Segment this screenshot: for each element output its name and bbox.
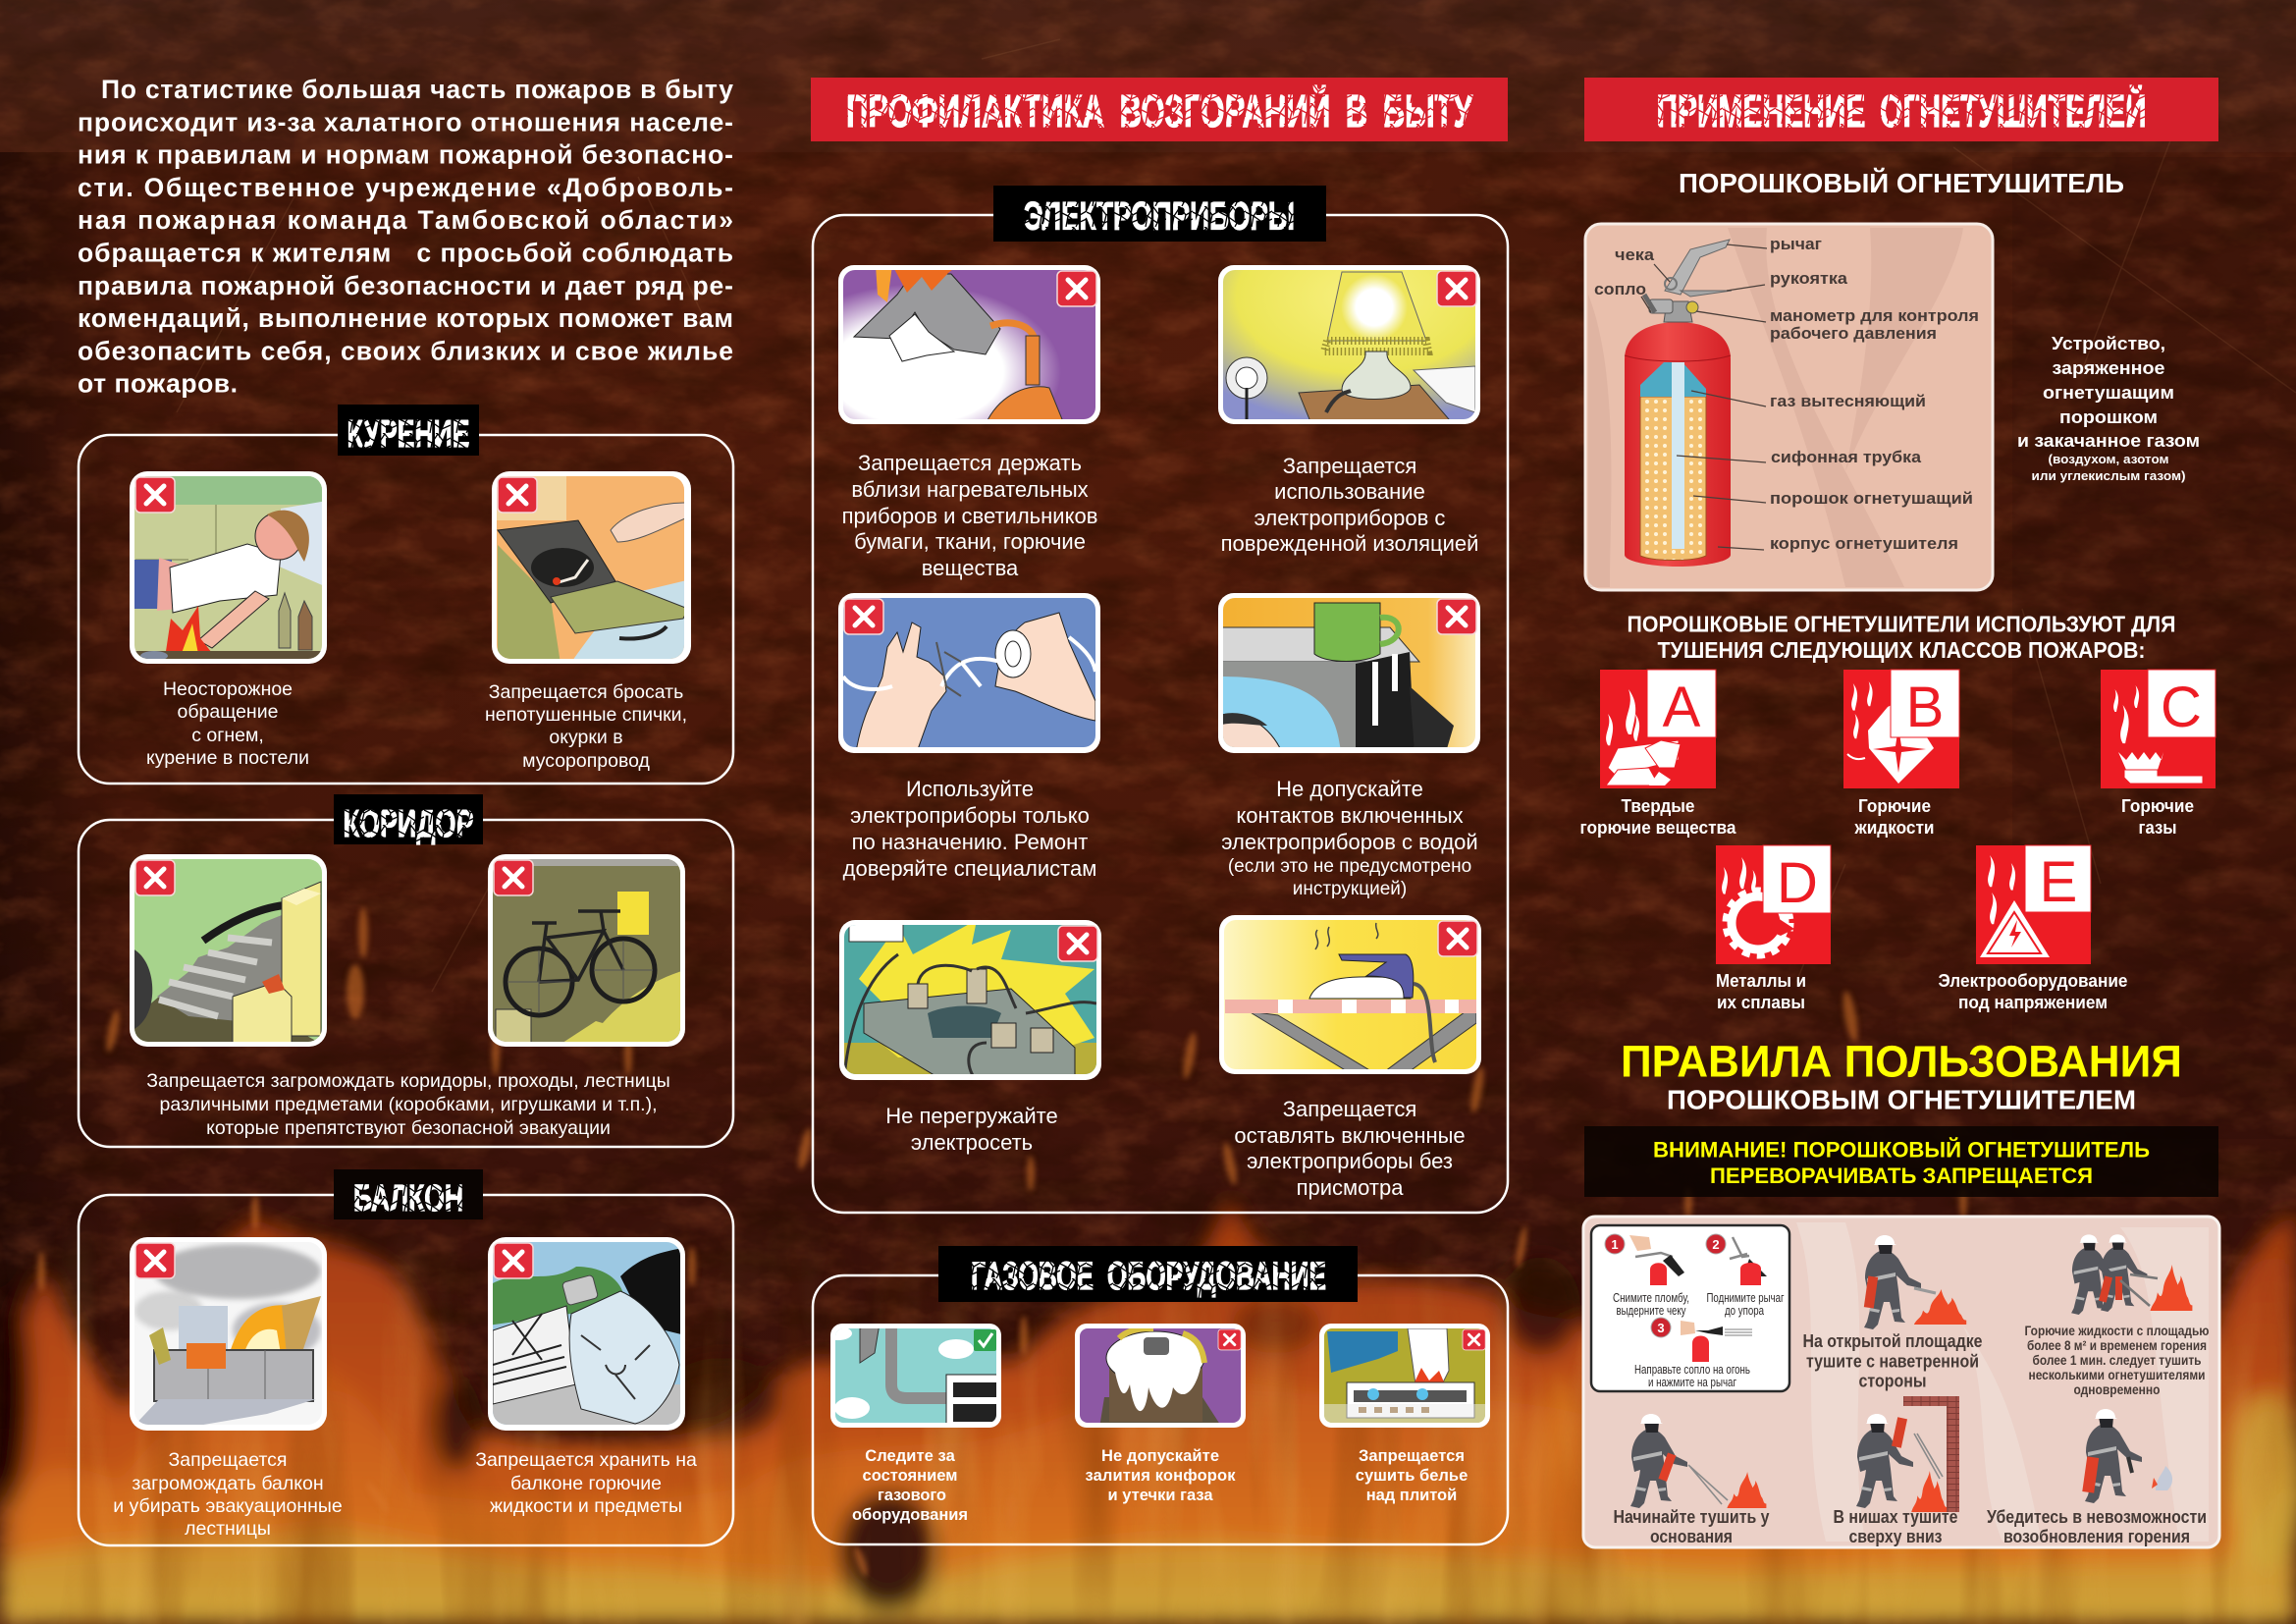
caption: do not overload: Не перегружайте [885, 1104, 1058, 1128]
intro paragraph: от пожаров. [78, 369, 238, 399]
caption: careless fire handling: Неосторожное [163, 678, 293, 700]
text: large spill rule: несколькими огнетушителями [2028, 1368, 2205, 1382]
illustration: cluttered stairs [130, 854, 327, 1047]
icon: fire class A: A [1663, 676, 1701, 739]
step 1 [1605, 1234, 1689, 1318]
illustration: flammables on balcony [488, 1237, 685, 1431]
labels: fire classes: Электрооборудование [1938, 971, 2128, 991]
step 2 [1706, 1234, 1785, 1318]
illustration: pot boiling over [1075, 1324, 1246, 1428]
caption: do not overload [885, 1104, 1058, 1155]
illustration: bicycle in hallway [488, 854, 685, 1047]
illustration: overloaded power strip [839, 920, 1101, 1080]
illustration: paper on a lamp [838, 265, 1100, 424]
step 1: выдерните чеку [1616, 1304, 1686, 1318]
caption: balcony clutter: Запрещается [169, 1449, 287, 1471]
heading: smoking: КУРЕНИЕ [347, 413, 469, 456]
icon: fire class C [2101, 670, 2216, 788]
illustration: mug on a television [1218, 593, 1480, 753]
caption: do not clutter corridors: различными предметами (коробками, игрушками и т.п.), [159, 1094, 658, 1115]
icon: fire class E [1976, 845, 2091, 964]
heading: electrical appliances [993, 186, 1326, 242]
caption: monitor gas equipment: газового [878, 1487, 946, 1504]
text: extinguisher description: (воздухом, азотом [2048, 452, 2169, 466]
caption: avoid water contact [1221, 777, 1478, 899]
labels: fire classes [1580, 796, 2194, 1012]
caption: no drying laundry over stove: Запрещается [1359, 1447, 1465, 1465]
icon: two firefighters [2071, 1234, 2192, 1315]
caption: use appliances as intended: по назначению. Ремонт [852, 830, 1088, 854]
illustration: garbage chute [492, 471, 691, 664]
icon: fire class E: E [2040, 850, 2077, 914]
caption: keep paper from heaters: приборов и светильников [842, 504, 1097, 528]
caption: do not clutter corridors: Запрещается загромождать коридоры, проходы, лестницы [146, 1070, 670, 1092]
caption: avoid water contact: инструкцией) [1293, 879, 1407, 899]
caption: balcony clutter: загромождать балкон [132, 1473, 324, 1494]
caption: cigarette butts in chute: Запрещается бросать [489, 681, 683, 703]
icon: firefighter windward [1864, 1235, 1966, 1329]
caption: avoid water contact: контактов включенных [1236, 803, 1464, 828]
icon: firefighter at niche wall [1856, 1396, 1959, 1512]
panel: usage rules [1583, 1217, 2219, 1547]
text: large spill rule: более 1 мин. следует тушить [2032, 1353, 2201, 1368]
labels: fire classes: Твердые [1622, 796, 1694, 816]
text: bottom rules: Убедитесь в невозможности [1987, 1507, 2207, 1527]
heading: fire classes: ПОРОШКОВЫЕ ОГНЕТУШИТЕЛИ ИСПОЛЬЗУЮТ ДЛЯ [1628, 611, 2175, 636]
caption: careless fire handling [146, 678, 309, 769]
banner: fire prevention at home [811, 78, 1508, 141]
panel: gas equipment [813, 1246, 1508, 1544]
text: extinguisher description: или углекислым газом) [2032, 468, 2185, 483]
heading: gas equipment: ГАЗОВОЕ ОБОРУДОВАНИЕ [971, 1255, 1326, 1298]
icon: fire class D [1716, 845, 1831, 964]
heading: balcony: БАЛКОН [353, 1178, 463, 1219]
illustration: smoking in bed [130, 471, 327, 664]
caption: no drying laundry over stove: сушить белье [1356, 1467, 1468, 1485]
heading: fire classes [1628, 611, 2175, 663]
caption: do not clutter corridors: которые препятствуют безопасной эвакуации [206, 1117, 611, 1139]
text: extinguisher description [2017, 333, 2200, 483]
caption: cigarette butts in chute: мусоропровод [522, 750, 651, 772]
heading: balcony [334, 1169, 483, 1219]
caption: flammables on balcony: Запрещается хранить на [475, 1449, 697, 1471]
leader lines [1641, 244, 1767, 550]
heading: rules of use [1621, 1037, 2182, 1115]
caption: balcony clutter: лестницы [185, 1518, 271, 1540]
intro paragraph: правила пожарной безопасности и дает ряд ре- [78, 271, 733, 300]
text: bottom rules: В нишах тушите [1834, 1507, 1957, 1527]
text: extinguisher description: и закачанное газом [2017, 430, 2200, 451]
icon: fire class B: B [1906, 676, 1944, 739]
labels: fire classes: под напряжением [1958, 993, 2108, 1012]
caption: cigarette butts in chute: непотушенные спички, [485, 704, 687, 726]
intro paragraph: комендаций, выполнение которых поможет вам [78, 303, 733, 333]
caption: balcony clutter: и убирать эвакуационные [113, 1495, 343, 1517]
caption: cigarette butts in chute [485, 681, 687, 772]
intro paragraph: обращается к жителям с просьбой соблюдать [78, 238, 733, 267]
caption: monitor gas equipment: Следите за [865, 1447, 956, 1465]
labels: fire classes: их сплавы [1717, 993, 1805, 1012]
banner: using extinguishers [1584, 78, 2218, 141]
icon: extinguisher [1625, 240, 1732, 567]
caption: prevent burner flooding: и утечки газа [1107, 1487, 1213, 1504]
labels: extinguisher parts: порошок огнетушащий [1770, 490, 1973, 508]
heading: corridor [334, 794, 483, 845]
caption: damaged insulation: использование [1274, 479, 1425, 504]
step 2: до упора [1725, 1304, 1764, 1318]
labels: extinguisher parts: сопло [1594, 281, 1646, 298]
caption: keep paper from heaters: Запрещается держать [858, 451, 1082, 475]
text: bottom rules: Начинайте тушить у [1614, 1507, 1769, 1527]
text: bottom rules: основания [1650, 1527, 1733, 1546]
caption: careless fire handling: с огнем, [191, 725, 264, 746]
text: bottom rules: сверху вниз [1849, 1527, 1943, 1546]
step 3: Направьте сопло на огонь [1634, 1363, 1750, 1377]
caption: do not clutter corridors [146, 1070, 670, 1139]
icon: fire class D: D [1777, 851, 1818, 915]
caption: monitor gas equipment: состоянием [862, 1467, 958, 1485]
caption: avoid water contact: Не допускайте [1276, 777, 1423, 801]
text: large spill rule [2024, 1324, 2209, 1397]
caption: avoid water contact: электроприборов с водой [1221, 830, 1478, 854]
labels: fire classes: горючие вещества [1580, 818, 1736, 838]
heading: gas equipment [938, 1246, 1358, 1302]
caption: do not leave unattended: оставлять включенные [1234, 1123, 1466, 1148]
intro paragraph [78, 75, 733, 399]
labels: fire classes: Горючие [2121, 796, 2194, 816]
caption: do not leave unattended: электроприборы без [1247, 1149, 1453, 1173]
callout: warning band: ВНИМАНИЕ! ПОРОШКОВЫЙ ОГНЕТУШИТЕЛЬ [1653, 1137, 2150, 1163]
step 1: 1 [1611, 1237, 1619, 1252]
labels: extinguisher parts [1594, 236, 1979, 553]
step 3: и нажмите на рычаг [1648, 1376, 1736, 1389]
callout: warning band: ПЕРЕВОРАЧИВАТЬ ЗАПРЕЩАЕТСЯ [1710, 1164, 2093, 1188]
caption: monitor gas equipment: оборудования [852, 1506, 968, 1524]
text: large spill rule: более 8 м² и временем горения [2027, 1338, 2207, 1353]
text: extinguisher description: Устройство, [2052, 333, 2165, 353]
heading: smoking [338, 405, 479, 456]
caption: use appliances as intended: электроприборы только [850, 803, 1090, 828]
caption: keep paper from heaters: вблизи нагревательных [851, 477, 1089, 502]
text: extinguisher description: заряженное [2052, 357, 2165, 378]
step 3: 3 [1657, 1321, 1665, 1335]
caption: damaged insulation: Запрещается [1283, 454, 1416, 478]
illustration: lamp with damaged cord [1218, 265, 1480, 424]
labels: extinguisher parts: газ вытесняющий [1770, 393, 1926, 410]
step 3 [1634, 1318, 1752, 1389]
heading: fire classes: ТУШЕНИЯ СЛЕДУЮЩИХ КЛАССОВ ПОЖАРОВ: [1657, 637, 2146, 663]
caption: flammables on balcony: балконе горючие [510, 1473, 662, 1494]
labels: extinguisher parts: рабочего давления [1770, 325, 1937, 343]
intro paragraph: обезопасить себя, своих близких и свое жилье [78, 336, 733, 365]
heading: electrical appliances: ЭЛЕКТРОПРИБОРЫ [1024, 194, 1295, 238]
step 2: Поднимите рычаг [1706, 1291, 1785, 1305]
caption: balcony clutter [113, 1449, 343, 1540]
caption: no drying laundry over stove: над плитой [1366, 1487, 1457, 1504]
caption: use appliances as intended: доверяйте специалистам [843, 856, 1096, 881]
text: large spill rule: одновременно [2073, 1382, 2160, 1397]
illustration: hands repairing wires [838, 593, 1100, 753]
labels: fire classes: жидкости [1854, 818, 1934, 838]
text: extinguisher description: огнетушащим [2043, 382, 2174, 403]
labels: fire classes: газы [2138, 818, 2177, 838]
heading: rules of use: ПРАВИЛА ПОЛЬЗОВАНИЯ [1621, 1037, 2182, 1086]
panel: electrical appliances [813, 186, 1508, 1213]
text: windward rule: стороны [1859, 1371, 1926, 1390]
caption: damaged insulation: поврежденной изоляцией [1221, 531, 1478, 556]
caption: keep paper from heaters: бумаги, ткани, горючие [854, 529, 1086, 554]
banner: fire prevention at home: ПРОФИЛАКТИКА ВОЗГОРАНИЙ В БЫТУ [846, 85, 1473, 136]
caption: do not leave unattended [1234, 1097, 1466, 1200]
caption: keep paper from heaters [842, 451, 1097, 580]
labels: extinguisher parts: чека [1615, 246, 1655, 264]
caption: prevent burner flooding [1086, 1447, 1236, 1504]
text: windward rule [1802, 1331, 1983, 1390]
panel: smoking [79, 405, 733, 784]
caption: avoid water contact: (если это не предусмотрено [1228, 856, 1471, 877]
heading: rules of use: ПОРОШКОВЫМ ОГНЕТУШИТЕЛЕМ [1667, 1084, 2136, 1115]
text: extinguisher description: порошком [2059, 406, 2158, 427]
intro paragraph: происходит из-за халатного отношения населе- [78, 107, 733, 136]
caption: monitor gas equipment [852, 1447, 968, 1524]
intro paragraph: сти. Общественное учреждение «Доброволь- [78, 173, 733, 202]
panel: extinguisher anatomy diagram [1585, 224, 1993, 590]
caption: careless fire handling: обращение [178, 701, 278, 723]
icon: green check [974, 1329, 996, 1351]
caption: use appliances as intended [843, 777, 1096, 881]
illustration: burning balcony [130, 1237, 327, 1431]
intro paragraph: ния к правилам и нормам пожарной безопасно- [78, 140, 733, 170]
caption: careless fire handling: курение в постели [146, 747, 309, 769]
labels: extinguisher parts: корпус огнетушителя [1770, 535, 1958, 553]
labels: fire classes: Металлы и [1716, 971, 1806, 991]
caption: use appliances as intended: Используйте [906, 777, 1034, 801]
heading: powder extinguisher: ПОРОШКОВЫЙ ОГНЕТУШИТЕЛЬ [1679, 167, 2124, 198]
text: windward rule: тушите с наветренной [1806, 1351, 1979, 1371]
caption: prevent burner flooding: Не допускайте [1101, 1447, 1219, 1465]
illustration: gas pipe check [825, 1324, 1001, 1428]
icon: fire class C: C [2161, 676, 2202, 739]
caption: flammables on balcony [475, 1449, 697, 1517]
caption: do not overload: электросеть [911, 1130, 1033, 1155]
panel: corridor [79, 794, 733, 1147]
caption: damaged insulation [1221, 454, 1478, 556]
heading: corridor: КОРИДОР [344, 803, 473, 845]
illustration: iron left on board [1219, 915, 1481, 1074]
icon: firefighter checking fire is out [2082, 1409, 2172, 1503]
caption: damaged insulation: электроприборов с [1255, 506, 1445, 530]
step 1: Снимите пломбу, [1613, 1291, 1689, 1305]
text: large spill rule: Горючие жидкости с площадью [2024, 1324, 2209, 1338]
caption: do not leave unattended: Запрещается [1283, 1097, 1416, 1121]
caption: do not leave unattended: присмотра [1297, 1175, 1404, 1200]
icon: firefighter at base of fire [1630, 1414, 1766, 1508]
icon: fire class A [1600, 670, 1716, 788]
intro paragraph: По статистике большая часть пожаров в быту [101, 75, 733, 104]
labels: extinguisher parts: рычаг [1770, 236, 1822, 253]
caption: prevent burner flooding: залития конфорок [1086, 1467, 1236, 1485]
box: preparation steps [1591, 1225, 1789, 1391]
step 2: 2 [1712, 1237, 1720, 1252]
caption: cigarette butts in chute: окурки в [549, 727, 623, 748]
caption: flammables on balcony: жидкости и предметы [490, 1495, 682, 1517]
labels: extinguisher parts: сифонная трубка [1771, 449, 1922, 466]
text: bottom rules [1614, 1507, 2207, 1546]
caption: no drying laundry over stove [1356, 1447, 1468, 1504]
intro paragraph: ная пожарная команда Тамбовской области» [78, 205, 733, 235]
illustration: laundry over stove [1319, 1324, 1490, 1428]
callout: warning band [1584, 1126, 2218, 1197]
text: windward rule: На открытой площадке [1802, 1331, 1983, 1351]
icon: fire class B [1843, 670, 1959, 788]
labels: extinguisher parts: рукоятка [1770, 270, 1848, 288]
labels: extinguisher parts: манометр для контроля [1770, 307, 1979, 325]
text: bottom rules: возобновления горения [2003, 1527, 2190, 1546]
caption: keep paper from heaters: вещества [922, 556, 1019, 580]
panel: balcony [79, 1169, 733, 1545]
labels: fire classes: Горючие [1858, 796, 1931, 816]
